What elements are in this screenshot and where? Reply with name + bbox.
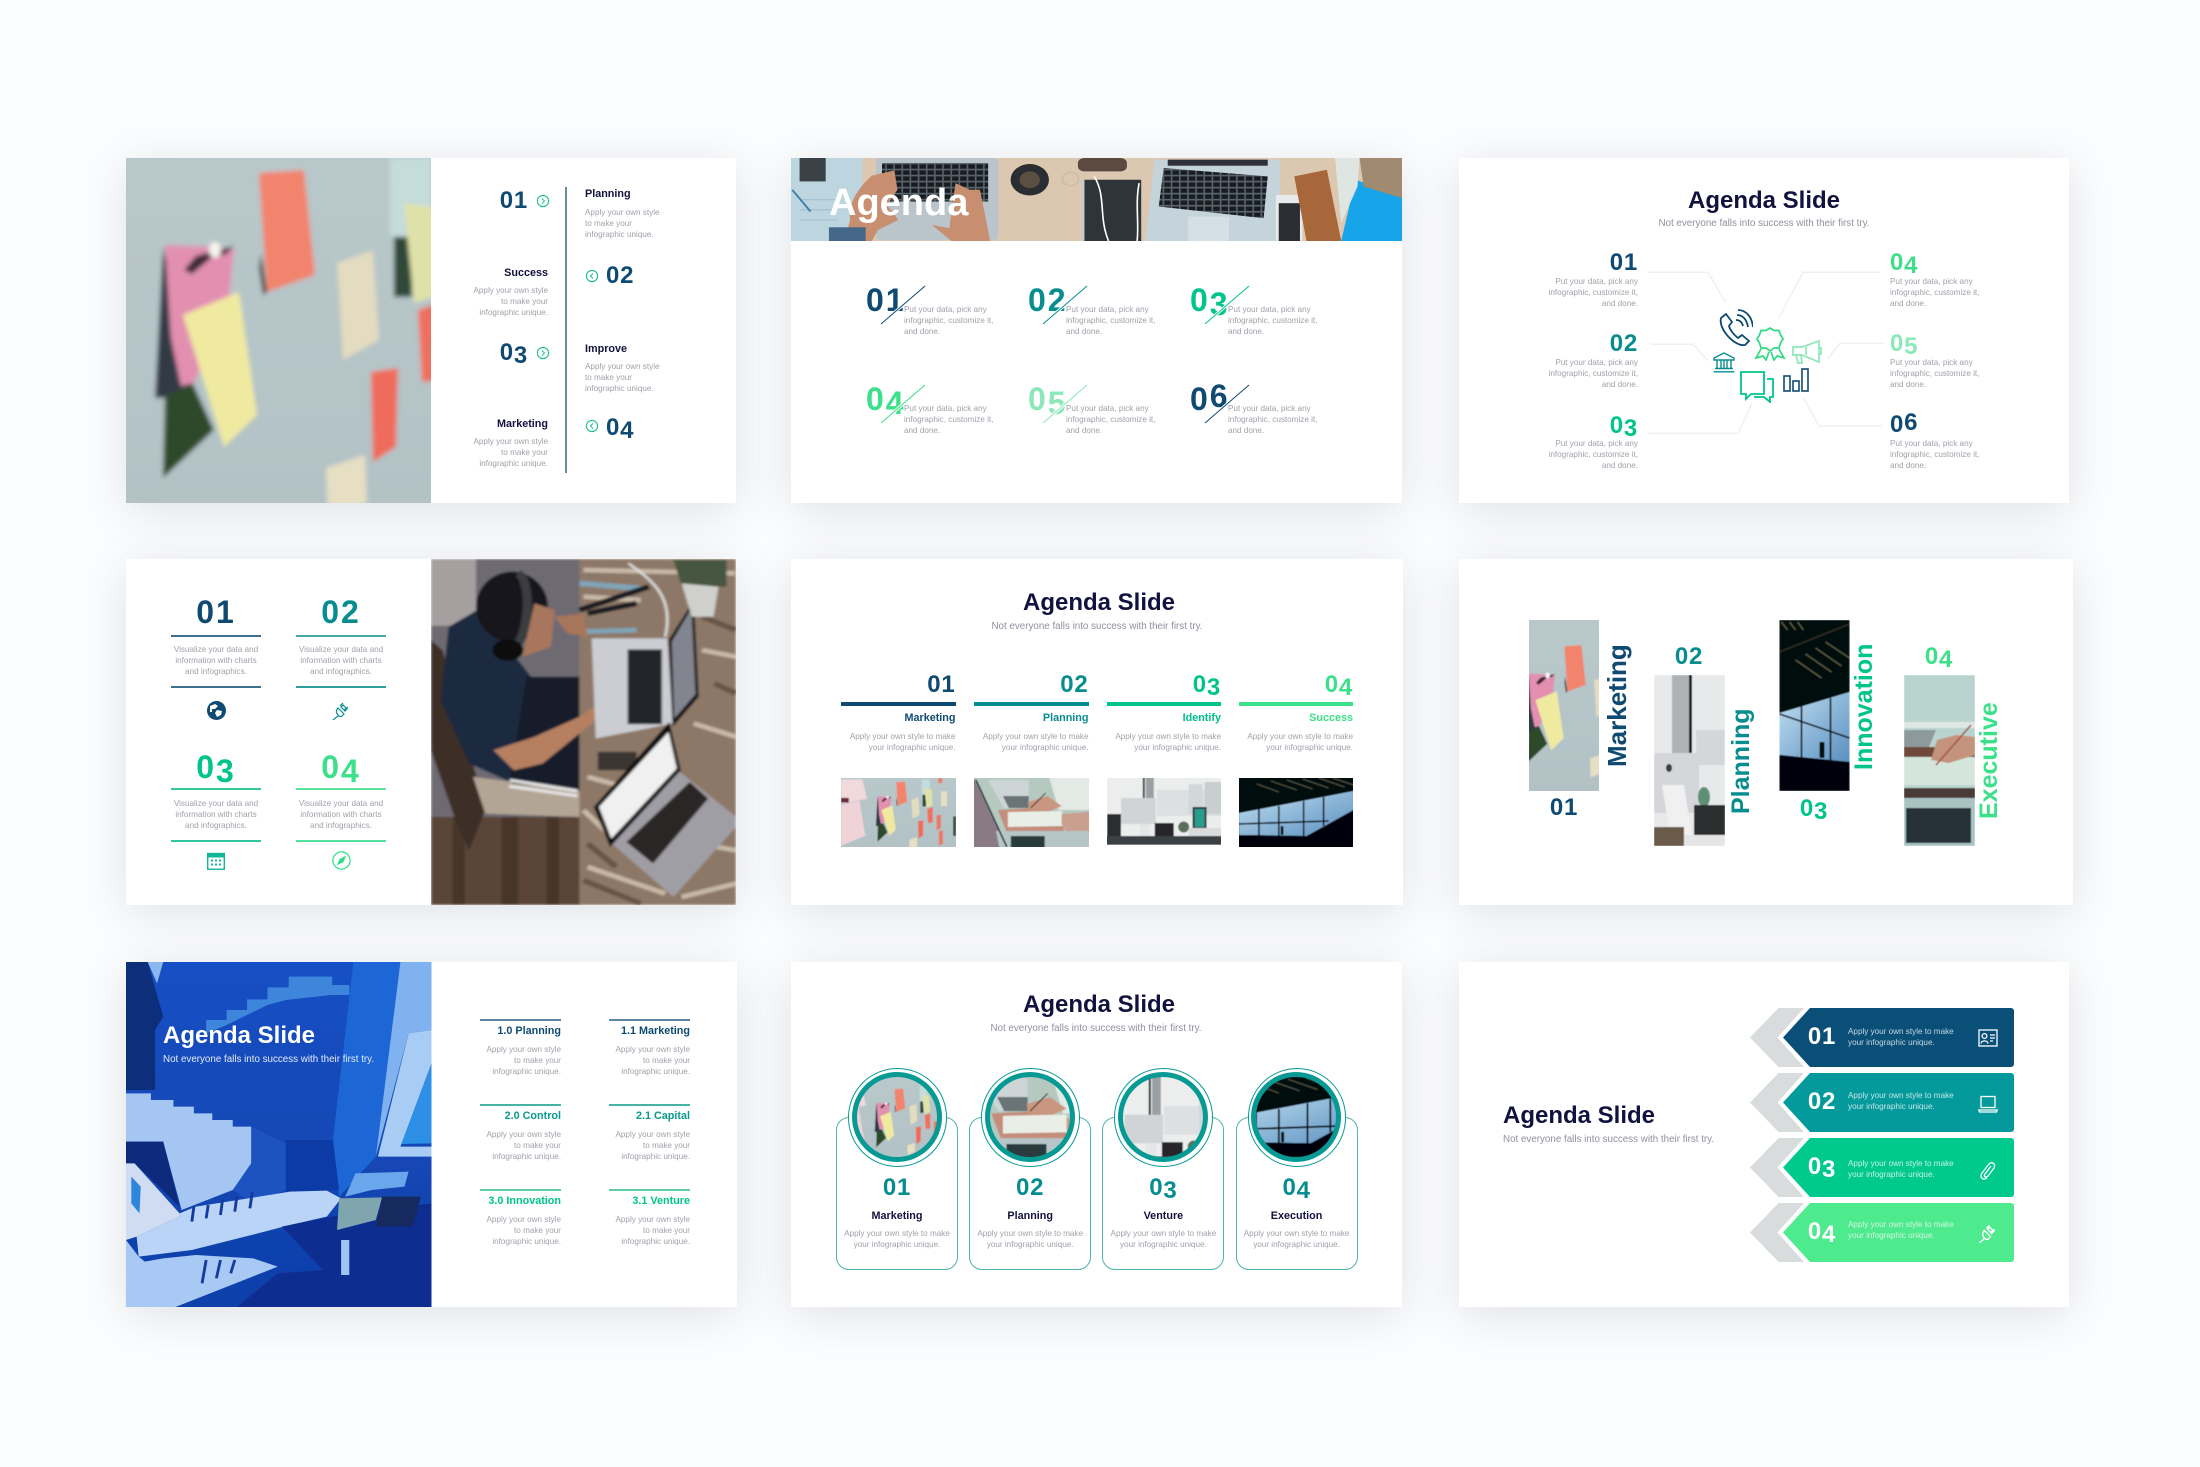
subtitle: Not everyone falls into success with their first try. — [991, 621, 1203, 632]
text 03: infographic, customize it, — [1549, 450, 1638, 459]
icon: award ribbon — [1754, 327, 1786, 361]
connector lines — [1648, 272, 1884, 434]
column 02: Planning — [1043, 712, 1088, 724]
column 04: 04 — [1325, 671, 1353, 701]
text 01: and done. — [1602, 299, 1638, 308]
text: Success description — [473, 286, 548, 317]
item 04: and done. — [904, 426, 940, 435]
title: Agenda Slide: Agenda Slide — [1688, 187, 1840, 214]
card 04 — [1236, 1068, 1358, 1269]
photo: dark building crop — [1778, 620, 1850, 791]
card 02 — [969, 1068, 1091, 1269]
photo: hand writing at laptop crop — [1904, 675, 1974, 846]
text: Marketing description — [473, 437, 548, 468]
text: Planning description — [585, 208, 660, 238]
item 01: 01 — [866, 282, 906, 318]
icon: chevron left circle — [586, 270, 598, 282]
arrow row 03 — [1750, 1138, 2014, 1197]
arrow row 02: your infographic unique. — [1848, 1102, 1935, 1111]
card 02: your infographic unique. — [987, 1240, 1074, 1249]
text 03 — [1549, 439, 1638, 470]
item 01: 01 — [196, 594, 236, 630]
item 02 — [1028, 282, 1155, 336]
photo: sticky notes crop — [1529, 620, 1599, 791]
arrow row 04 — [1750, 1203, 2014, 1262]
card 04: your infographic unique. — [1253, 1240, 1340, 1249]
text: Improve description: to make your — [585, 373, 632, 382]
text: Marketing description: infographic unique. — [479, 459, 548, 468]
number 04: 04 — [606, 414, 634, 444]
vertical divider line — [565, 187, 566, 473]
arrow row 03: Apply your own style to make — [1848, 1159, 1954, 1168]
item 2.0 Control: to make your — [514, 1140, 561, 1150]
card 04: 04 — [1282, 1174, 1311, 1204]
number 03: 03 — [1800, 795, 1828, 825]
card 04: Apply your own style to make — [1244, 1229, 1349, 1238]
text 05 — [1890, 358, 1979, 389]
panel: planning timeline slide — [126, 158, 736, 503]
card 01 — [836, 1068, 958, 1269]
item 1.1 Marketing: Apply your own style — [615, 1044, 690, 1054]
text 02: Put your data, pick any — [1555, 358, 1638, 367]
item 01: infographic, customize it, — [904, 316, 993, 325]
card 03 — [1102, 1068, 1224, 1269]
photo: blue stairs architecture — [126, 962, 432, 1307]
icon: bar chart — [1783, 368, 1809, 392]
panel: four-column slide — [791, 559, 1403, 905]
item 04: and infographics. — [310, 821, 372, 830]
column 02: 02 — [1060, 671, 1088, 698]
text: Improve: Improve — [585, 343, 627, 355]
panel: blue stairs slide — [126, 962, 737, 1307]
title: Agenda Slide: Agenda Slide — [1503, 1102, 1655, 1129]
item 03: and done. — [1228, 327, 1264, 336]
label: Innovation: Innovation — [1850, 644, 1878, 770]
arrow row 02: 02 — [1808, 1088, 1836, 1115]
text: Improve description: infographic unique. — [585, 384, 654, 393]
photo: man with headphones at laptops — [431, 559, 736, 905]
subtitle: Not everyone falls into success with their first try. — [1658, 218, 1870, 229]
item 01: Put your data, pick any — [904, 305, 987, 314]
item 01: information with charts — [175, 656, 257, 665]
column 01: 01 — [927, 671, 956, 698]
item 03: Visualize your data and — [174, 799, 258, 808]
item 05: 05 — [1028, 381, 1068, 421]
text 05: infographic, customize it, — [1890, 369, 1979, 378]
item 2.1 Capital: infographic unique. — [621, 1152, 690, 1160]
number 04: 04 — [1890, 249, 1918, 279]
item 02 — [296, 594, 386, 720]
photo: laptops on a desk header — [791, 158, 1402, 241]
item 3.0 Innovation: to make your — [514, 1226, 561, 1234]
text 04 — [1890, 277, 1979, 308]
number 04: 04 — [1925, 643, 1953, 673]
column 02 — [974, 669, 1089, 847]
item 3.0 Innovation: 3.0 Innovation — [488, 1195, 561, 1207]
icon: chevron right circle — [536, 346, 550, 360]
card 01: Apply your own style to make — [844, 1229, 950, 1238]
item 04: 04 — [866, 381, 906, 421]
item 2.0 Control: 2.0 Control — [505, 1110, 561, 1122]
column 04: your infographic unique. — [1266, 743, 1353, 752]
subtitle: Not everyone falls into success with their first try. — [163, 1054, 374, 1065]
item 2.1 Capital: to make your — [643, 1140, 690, 1150]
card 01: Marketing — [872, 1210, 922, 1222]
title: Agenda Slide: Agenda Slide — [1023, 589, 1175, 616]
number 01: 01 — [500, 187, 528, 214]
title: Agenda: Agenda — [829, 182, 968, 224]
card 02: Planning — [1007, 1210, 1053, 1222]
item 04: 04 — [321, 749, 361, 789]
panel: arrow list slide — [1459, 962, 2069, 1307]
panel: circular photo cards slide — [791, 962, 1402, 1307]
item 3.0 Innovation: Apply your own style — [486, 1214, 561, 1224]
item 02: Visualize your data and — [299, 645, 383, 654]
card 01: 01 — [883, 1174, 911, 1201]
item 3.0 Innovation — [480, 1189, 561, 1251]
item 3.1 Venture: 3.1 Venture — [632, 1195, 690, 1207]
item 1.1 Marketing: to make your — [643, 1056, 690, 1064]
item 06: infographic, customize it, — [1228, 415, 1317, 424]
arrow row 02: Apply your own style to make — [1848, 1091, 1954, 1100]
item 03: information with charts — [175, 810, 257, 819]
number 05: 05 — [1890, 330, 1918, 360]
number 01: 01 — [1610, 249, 1638, 276]
icon: megaphone — [1792, 340, 1822, 364]
item 03: infographic, customize it, — [1228, 316, 1317, 325]
column 01 — [841, 669, 956, 847]
item 06: 06 — [1190, 378, 1230, 417]
panel: vertical labels slide — [1459, 559, 2073, 905]
column 02: Apply your own style to make — [983, 732, 1088, 741]
item 01: Visualize your data and — [174, 645, 258, 654]
subtitle: Not everyone falls into success with their first try. — [1503, 1134, 1714, 1145]
item 1.0 Planning: infographic unique. — [492, 1066, 561, 1076]
text: Marketing: Marketing — [497, 418, 548, 430]
icon: chevron left circle — [586, 420, 598, 432]
item 05: infographic, customize it, — [1066, 415, 1155, 424]
column 02: your infographic unique. — [1002, 743, 1088, 752]
text 02 — [1549, 358, 1638, 389]
arrow row 04: Apply your own style to make — [1848, 1220, 1954, 1229]
column 03: your infographic unique. — [1134, 743, 1221, 752]
item 03: 03 — [196, 749, 236, 789]
title: Agenda Slide: Agenda Slide — [163, 1022, 315, 1049]
arrow row 01: Apply your own style to make — [1848, 1027, 1954, 1036]
item 05: Put your data, pick any — [1066, 404, 1149, 413]
item 1.0 Planning — [480, 1019, 561, 1081]
item 03 — [1190, 282, 1317, 336]
item 06: Put your data, pick any — [1228, 404, 1311, 413]
text: Improve description: Apply your own style — [585, 362, 660, 371]
column 01: Apply your own style to make — [850, 732, 956, 741]
item 3.1 Venture: to make your — [643, 1226, 690, 1234]
text: Success description: Apply your own style — [473, 286, 548, 295]
item 04 — [296, 749, 386, 870]
item 02: and done. — [1066, 327, 1102, 336]
text 06: infographic, customize it, — [1890, 450, 1979, 459]
item 2.1 Capital — [609, 1104, 690, 1166]
text 02: infographic, customize it, — [1549, 369, 1638, 378]
item 2.0 Control: Apply your own style — [486, 1130, 561, 1138]
arrow row 01: your infographic unique. — [1848, 1038, 1935, 1047]
photo: office with computer crop — [1654, 675, 1725, 846]
label: Marketing: Marketing — [1602, 644, 1632, 767]
item 2.1 Capital: Apply your own style — [615, 1130, 690, 1138]
item 04 — [866, 381, 993, 435]
arrow row 01: 01 — [1808, 1023, 1836, 1050]
card 03: your infographic unique. — [1120, 1240, 1207, 1249]
icon: chat bubbles — [1740, 371, 1774, 403]
text 01: infographic, customize it, — [1549, 288, 1638, 297]
column 04: Success — [1309, 712, 1353, 724]
item 1.1 Marketing: infographic unique. — [621, 1066, 690, 1076]
text 03: Put your data, pick any — [1555, 439, 1638, 448]
item 1.1 Marketing: 1.1 Marketing — [621, 1025, 690, 1037]
panel: agenda six items slide — [791, 158, 1402, 503]
photo: sticky notes on a wall — [126, 158, 431, 503]
item 06: and done. — [1228, 426, 1264, 435]
text 06: Put your data, pick any — [1890, 439, 1973, 448]
item 02: information with charts — [300, 656, 382, 665]
item 05: and done. — [1066, 426, 1102, 435]
item 02: infographic, customize it, — [1066, 316, 1155, 325]
text 06 — [1890, 439, 1979, 470]
item 02: Put your data, pick any — [1066, 305, 1149, 314]
card 03: Venture — [1144, 1210, 1183, 1222]
item 01: and done. — [904, 327, 940, 336]
number 06: 06 — [1890, 409, 1918, 438]
label: Executive: Executive — [1975, 702, 2003, 819]
arrow row 03: your infographic unique. — [1848, 1170, 1935, 1179]
column 01: Marketing — [904, 712, 956, 724]
icon: bank — [1713, 352, 1735, 372]
column 01: your infographic unique. — [869, 743, 956, 752]
text 01: Put your data, pick any — [1555, 277, 1638, 286]
icon: chevron right circle — [536, 194, 550, 208]
item 01: and infographics. — [185, 667, 247, 676]
text 04: Put your data, pick any — [1890, 277, 1973, 286]
item 02: 02 — [1028, 282, 1068, 318]
number 02: 02 — [1675, 643, 1703, 670]
item 03: 03 — [1190, 282, 1230, 322]
item 2.0 Control: infographic unique. — [492, 1152, 561, 1160]
number 02: 02 — [1610, 330, 1638, 357]
text 06: and done. — [1890, 461, 1926, 470]
text 04: and done. — [1890, 299, 1926, 308]
arrow row 04: 04 — [1808, 1218, 1836, 1248]
icon: phone — [1720, 309, 1753, 346]
item 2.1 Capital: 2.1 Capital — [636, 1110, 690, 1122]
text 05: and done. — [1890, 380, 1926, 389]
item 06 — [1190, 378, 1317, 435]
column 03: 03 — [1193, 671, 1221, 701]
text: Success description: infographic unique. — [479, 308, 548, 317]
column 03: Identify — [1183, 712, 1221, 724]
panel: icon cluster slide — [1459, 158, 2069, 503]
text 01 — [1549, 277, 1638, 308]
item 1.0 Planning: to make your — [514, 1056, 561, 1064]
item 03: Put your data, pick any — [1228, 305, 1311, 314]
item 3.1 Venture: infographic unique. — [621, 1236, 690, 1246]
item 1.1 Marketing — [609, 1019, 690, 1081]
item 1.0 Planning: Apply your own style — [486, 1044, 561, 1054]
number 02: 02 — [606, 262, 634, 289]
title: Agenda Slide: Agenda Slide — [1023, 991, 1175, 1018]
text 02: and done. — [1602, 380, 1638, 389]
item 01 — [866, 282, 993, 336]
card 02: 02 — [1016, 1174, 1044, 1201]
number 03: 03 — [500, 339, 528, 369]
item 03: and infographics. — [185, 821, 247, 830]
card 02: Apply your own style to make — [977, 1229, 1083, 1238]
card 04: Execution — [1271, 1210, 1322, 1222]
arrow row 02 — [1750, 1073, 2014, 1132]
arrow row 03: 03 — [1808, 1153, 1836, 1183]
item 04: Visualize your data and — [299, 799, 383, 808]
item 04: infographic, customize it, — [904, 415, 993, 424]
card 03: Apply your own style to make — [1111, 1229, 1216, 1238]
text: Success description: to make your — [501, 297, 548, 306]
item 3.1 Venture — [609, 1189, 690, 1251]
item 02: and infographics. — [310, 667, 372, 676]
item 3.0 Innovation: infographic unique. — [492, 1236, 561, 1246]
text: Planning: Planning — [585, 188, 631, 200]
item 04: information with charts — [300, 810, 382, 819]
text 05: Put your data, pick any — [1890, 358, 1973, 367]
text: Improve description — [585, 362, 660, 393]
card 01: your infographic unique. — [854, 1240, 940, 1249]
text 04: infographic, customize it, — [1890, 288, 1979, 297]
number 01: 01 — [1550, 794, 1578, 821]
text: Planning description: Apply your own style — [585, 208, 660, 216]
item 2.0 Control — [480, 1104, 561, 1166]
text: Planning description: infographic unique. — [585, 230, 654, 238]
text: Success: Success — [504, 267, 548, 279]
text: Planning description: to make your — [585, 218, 632, 228]
arrow row 01 — [1750, 1008, 2014, 1067]
item 1.0 Planning: 1.0 Planning — [497, 1025, 561, 1037]
item 03 — [171, 749, 261, 870]
column 04 — [1238, 669, 1354, 847]
item 01 — [171, 594, 261, 720]
item 02: 02 — [321, 594, 361, 630]
item 3.1 Venture: Apply your own style — [615, 1214, 690, 1224]
label: Planning: Planning — [1726, 708, 1754, 814]
card 03: 03 — [1149, 1174, 1178, 1204]
arrow row 04: your infographic unique. — [1848, 1231, 1935, 1240]
column 03 — [1106, 669, 1222, 847]
text: Marketing description: Apply your own style — [473, 437, 548, 446]
number 03: 03 — [1610, 412, 1638, 442]
item 04: Put your data, pick any — [904, 404, 987, 413]
panel: four-block slide with photo — [126, 559, 736, 905]
text: Marketing description: to make your — [501, 448, 548, 457]
column 03: Apply your own style to make — [1115, 732, 1221, 741]
item 05 — [1028, 381, 1155, 435]
column 04: Apply your own style to make — [1247, 732, 1353, 741]
text 03: and done. — [1602, 461, 1638, 470]
subtitle: Not everyone falls into success with their first try. — [990, 1023, 1202, 1034]
